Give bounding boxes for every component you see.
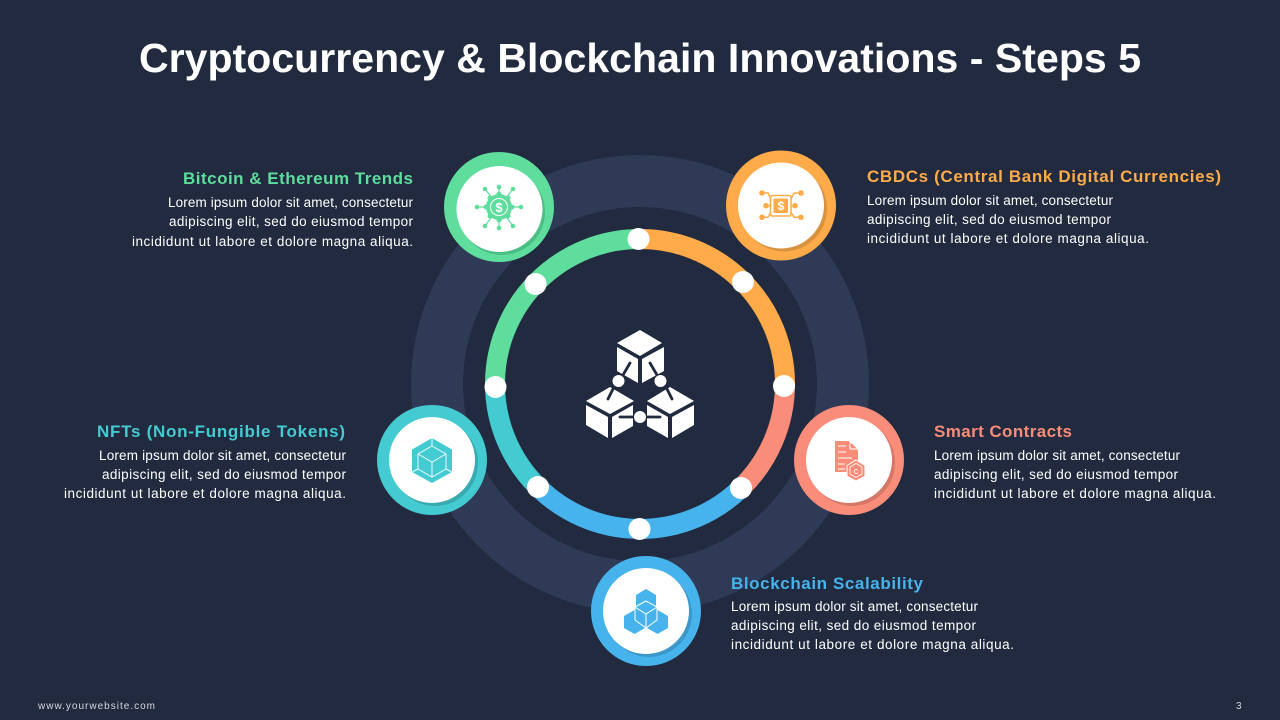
text: NFTs: Lorem ipsum dolor sit amet, consectetur — [99, 448, 346, 463]
badge: salmon — [794, 405, 904, 515]
footer website: www.yourwebsite.com — [37, 701, 155, 712]
segmented progress ring — [495, 239, 785, 529]
text: Smart Contracts: incididunt ut labore et dolore magna aliqua. — [934, 486, 1216, 501]
ring node dots — [484, 228, 795, 540]
badge: teal — [377, 405, 487, 515]
text: Blockchain Scalability: incididunt ut labore et dolore magna aliqua. — [731, 637, 1014, 652]
step 5: NFTs — [64, 405, 487, 515]
text: NFTs: NFTs (Non-Fungible Tokens) — [97, 422, 345, 441]
text: Blockchain Scalability: Lorem ipsum dolor sit amet, consectetur — [731, 599, 978, 614]
page number: 3 — [1236, 701, 1242, 712]
text: Blockchain Scalability: Blockchain Scalability — [731, 574, 924, 593]
text: Bitcoin & Ethereum Trends — [132, 169, 414, 249]
text: CBDCs — [867, 167, 1221, 246]
icon: contract document: c — [854, 466, 859, 476]
icon: dollar chip: $ — [777, 199, 784, 213]
step 3: Smart Contracts — [794, 405, 1216, 515]
badge: blue — [591, 556, 701, 666]
text: Bitcoin & Ethereum Trends: adipiscing elit, sed do eiusmod tempor — [169, 214, 414, 229]
badge: orange — [726, 150, 836, 260]
outer background ring — [437, 181, 843, 587]
text: Blockchain Scalability: adipiscing elit, sed do eiusmod tempor — [731, 618, 976, 633]
icon: dollar network gear: $ — [495, 200, 503, 215]
text: Smart Contracts: Smart Contracts — [934, 422, 1072, 441]
text: Smart Contracts: Lorem ipsum dolor sit amet, consectetur — [934, 448, 1180, 463]
text: Smart Contracts — [934, 422, 1216, 501]
step 2: CBDCs — [726, 150, 1221, 260]
step 1: Bitcoin & Ethereum Trends — [132, 152, 554, 262]
title: Cryptocurrency & Blockchain Innovations - Steps 5 — [139, 35, 1141, 81]
text: NFTs — [64, 422, 346, 501]
icon: three hexagon blocks — [624, 589, 668, 634]
step 4: Blockchain Scalability — [591, 556, 1014, 666]
text: CBDCs: adipiscing elit, sed do eiusmod tempor — [867, 212, 1112, 227]
text: CBDCs: Lorem ipsum dolor sit amet, consectetur — [867, 193, 1114, 208]
text: Bitcoin & Ethereum Trends: Lorem ipsum dolor sit amet, consectetur — [168, 195, 414, 210]
badge: green — [444, 152, 554, 262]
text: Bitcoin & Ethereum Trends: incididunt ut labore et dolore magna aliqua. — [132, 234, 413, 249]
text: Smart Contracts: adipiscing elit, sed do eiusmod tempor — [934, 467, 1178, 482]
text: Bitcoin & Ethereum Trends: Bitcoin & Ethereum Trends — [183, 169, 413, 188]
icon: central blockchain cubes — [586, 330, 694, 438]
icon: NFT hexagon cube — [412, 438, 452, 483]
text: CBDCs: incididunt ut labore et dolore magna aliqua. — [867, 231, 1149, 246]
text: NFTs: incididunt ut labore et dolore magna aliqua. — [64, 486, 346, 501]
text: NFTs: adipiscing elit, sed do eiusmod tempor — [102, 467, 346, 482]
text: Blockchain Scalability — [731, 574, 1014, 652]
text: CBDCs: CBDCs (Central Bank Digital Currencies) — [867, 167, 1221, 186]
